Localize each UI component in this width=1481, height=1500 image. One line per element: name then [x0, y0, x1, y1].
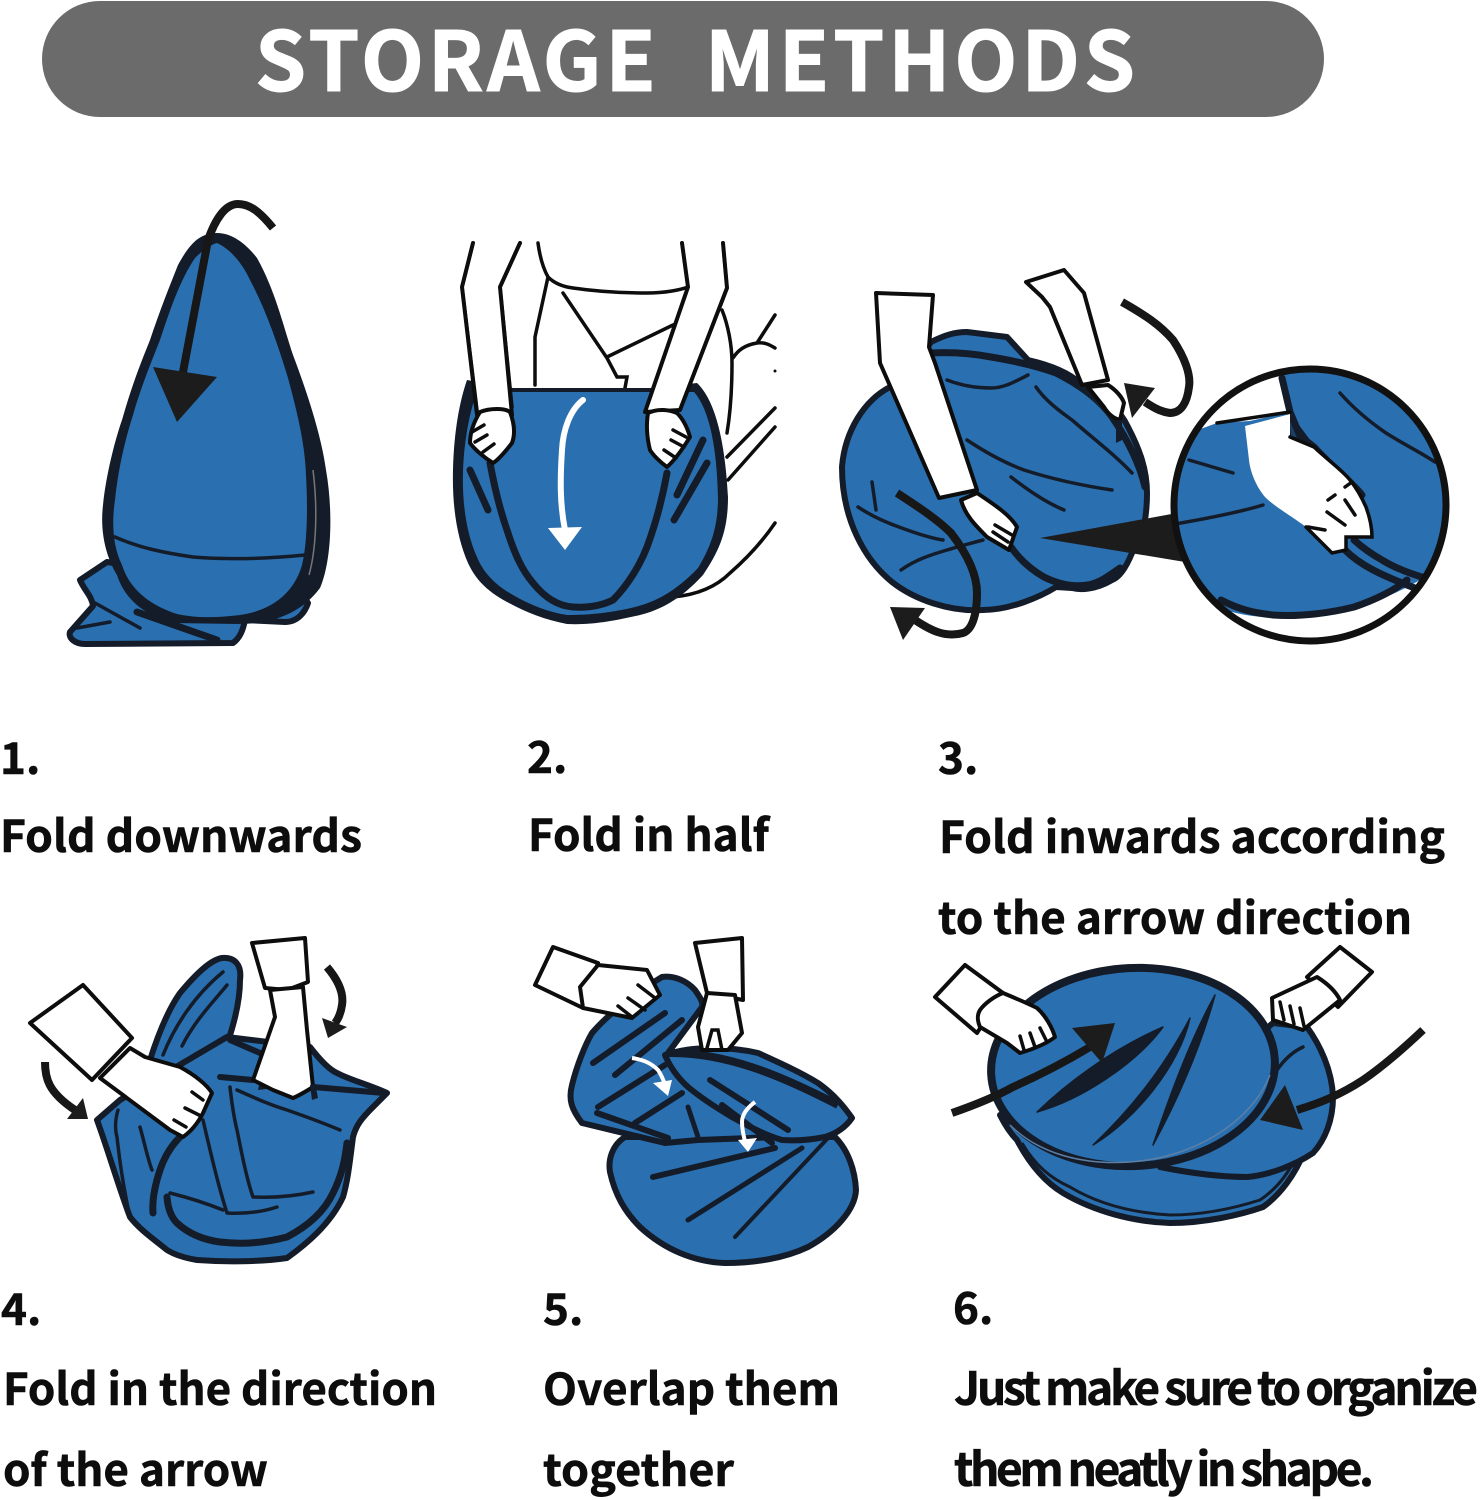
step 1 label: 1.: [0, 723, 40, 787]
step 3 label: to the arrow direction: [938, 883, 1412, 947]
title banner: [42, 0, 1324, 117]
step 4 label: of the arrow: [3, 1435, 268, 1499]
illustration: step 1 teardrop tent: [70, 204, 330, 644]
step 4 label: 4.: [1, 1274, 41, 1338]
tent body: [453, 380, 728, 624]
middle disc: [1160, 1023, 1333, 1177]
hands: [30, 938, 318, 1137]
cloth at base: [70, 562, 308, 644]
fold creases: [1037, 995, 1215, 1145]
step 6 label: Just make sure to organize: [954, 1353, 1478, 1419]
bottom disc: [1000, 1100, 1305, 1223]
step 5 label: Overlap them: [543, 1354, 840, 1418]
lower disc: [610, 1137, 856, 1263]
arrow: fold downwards: [153, 204, 273, 422]
teardrop frame: [102, 233, 330, 624]
illustration: step 4 fold in direction of arrow: [30, 938, 387, 1261]
upper left fold: [570, 977, 778, 1143]
illustration: step 6 organize neatly: [935, 947, 1423, 1223]
arrows: [952, 1023, 1423, 1130]
step 6 label: 6.: [953, 1273, 993, 1337]
background lines: [673, 310, 775, 597]
curved arrows: [890, 302, 1189, 640]
step 5 label: [543, 1274, 840, 1499]
folds: [593, 1013, 828, 1237]
step 5 label: together: [543, 1435, 735, 1499]
step 4 label: Fold in the direction: [3, 1354, 437, 1418]
step 1 label: Fold downwards: [0, 801, 362, 865]
magnified circle: [1170, 360, 1450, 660]
step 3 label: 3.: [938, 723, 978, 787]
step 2 label: 2.: [527, 722, 567, 786]
step 4 label: [1, 1274, 437, 1499]
white sleeve and bottom segment: [1202, 375, 1286, 429]
step 3 label: [938, 723, 1445, 947]
arms and hands: [876, 270, 1124, 550]
step 6 label: [953, 1273, 1478, 1500]
step 2 label: [527, 722, 771, 864]
illustration: step 2 fold in half: [453, 243, 776, 624]
top disc: [986, 961, 1280, 1173]
tent body: [97, 1037, 387, 1261]
step 5 label: 5.: [543, 1274, 583, 1338]
upper right flap: [665, 1048, 852, 1140]
illustration: step 3 fold inwards with magnified view: [842, 270, 1450, 660]
curved arrows: [45, 967, 347, 1119]
hands: [935, 947, 1372, 1053]
hands: [535, 938, 743, 1050]
step 6 label: them neatly in shape.: [954, 1434, 1374, 1500]
loop: [150, 958, 240, 1080]
step 3 label: Fold inwards according: [939, 802, 1445, 866]
illustration: step 5 overlap together: [535, 938, 856, 1263]
white arrows: [632, 1058, 757, 1152]
magnifier pointer: [1040, 513, 1185, 562]
torso: [535, 243, 688, 388]
step 2 label: Fold in half: [528, 800, 771, 864]
step 1 label: [0, 723, 362, 865]
arms and hands: [462, 243, 727, 467]
arrow: white down: [548, 400, 583, 550]
tent discs: [842, 332, 1147, 610]
